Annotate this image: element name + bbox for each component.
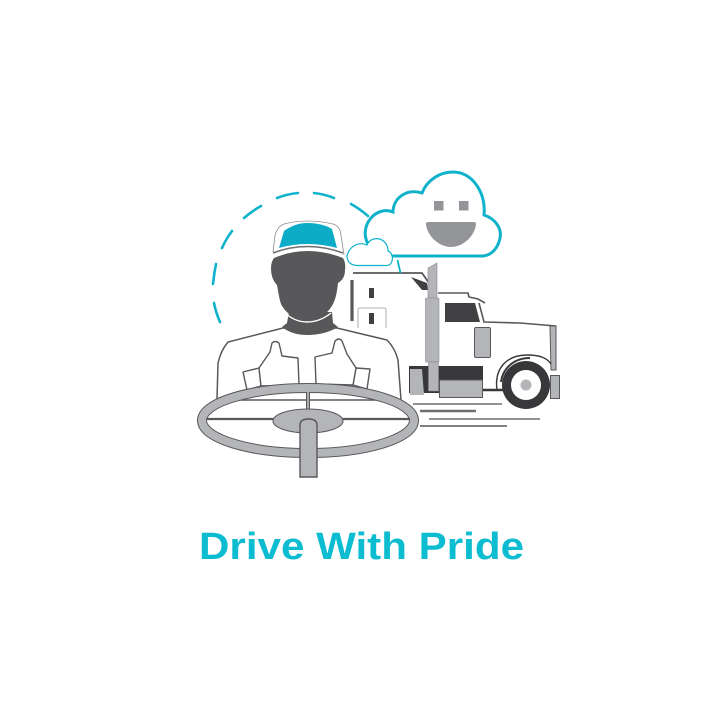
steering wheel [202, 388, 414, 477]
cap outline [273, 221, 344, 255]
truck cab body [352, 273, 556, 328]
radiator [550, 326, 556, 370]
large smiling cloud [365, 172, 500, 256]
cab door panel [474, 328, 490, 358]
cloud eyes [434, 201, 468, 210]
exhaust stack [426, 263, 439, 391]
left thumbs up [243, 342, 299, 390]
cloud smile [426, 222, 476, 247]
small cloud [347, 239, 392, 266]
dashed circle arc [213, 193, 368, 322]
cloud outline [365, 172, 500, 256]
wheel spokes [207, 418, 410, 420]
chassis [409, 366, 483, 393]
front bumper [550, 376, 560, 398]
head [271, 251, 345, 320]
fender [497, 355, 551, 390]
wheel hub [273, 409, 343, 433]
wheel rim [202, 388, 414, 453]
cab window [445, 303, 480, 322]
front wheel [502, 361, 550, 409]
right thumbs up [315, 339, 370, 389]
speed lines [413, 404, 540, 426]
torso outline [217, 328, 401, 400]
fuel tank [440, 380, 482, 398]
driver [217, 221, 401, 400]
frame rail [483, 389, 505, 391]
sleeper windows [369, 288, 374, 324]
steering column [300, 419, 317, 477]
cloud connector line [398, 260, 400, 273]
title: Drive With Pride [199, 526, 524, 568]
truck [352, 263, 560, 426]
rear step [410, 369, 424, 395]
cap brim [273, 246, 343, 253]
chin highlight [286, 313, 331, 322]
visor [411, 277, 428, 290]
neck [282, 312, 338, 335]
cap crown [279, 223, 337, 248]
